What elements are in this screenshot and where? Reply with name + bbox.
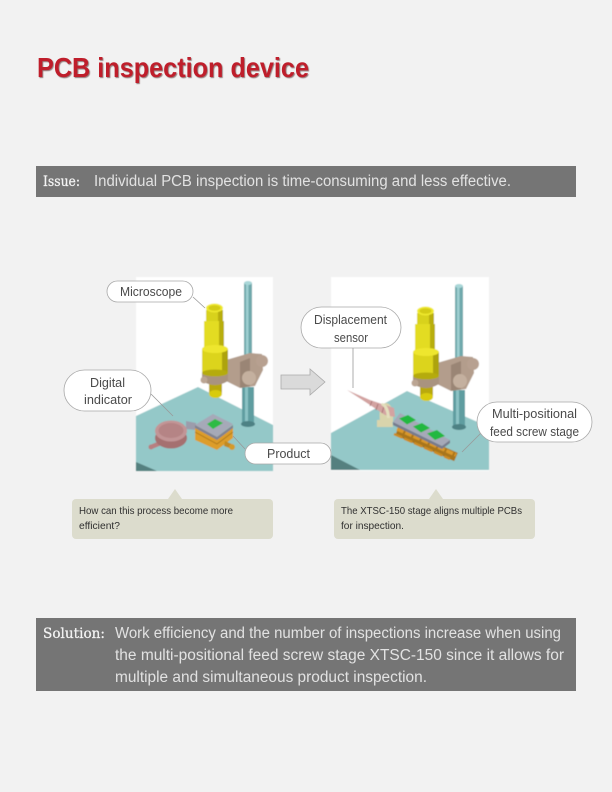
note: answer: The XTSC-150 stage aligns multiple PCBs [341,505,522,517]
displacement sensor [347,390,395,427]
callout: multi-positional feed screw stage: feed screw stage [490,425,579,439]
callout: digital indicator: Digital [90,376,125,390]
callout: microscope: Microscope [120,285,182,299]
single stage [195,414,235,450]
issue label: Issue: [43,174,80,190]
arrow: process transition [281,369,325,395]
panel: single inspection illustration [136,277,273,471]
feed screw stage [393,413,456,459]
table [331,391,489,470]
title: PCB inspection device [37,52,309,83]
solution text: the multi-positional feed screw stage XTSC-150 since it allows for [115,647,564,664]
issue text: Individual PCB inspection is time-consuming and less effective. [94,173,511,190]
callout: displacement sensor: Displacement [314,313,388,327]
note: question: efficient? [79,520,120,532]
callout: displacement sensor: sensor [334,331,368,345]
callout: digital indicator [64,370,173,416]
callout: displacement sensor [301,307,401,388]
note: answer: for inspection. [341,520,404,532]
callout: multi-positional feed screw stage: Multi-positional [492,407,577,421]
solution label: Solution: [43,626,105,642]
callout: multi-positional feed screw stage [462,402,592,452]
panel: solution banner [36,618,576,691]
solution text: multiple and simultaneous product inspection. [115,669,427,686]
microscope [412,284,479,430]
note: answer [334,489,535,539]
digital indicator [148,420,196,450]
table [136,387,273,471]
microscope [200,281,268,427]
note: question [72,489,273,539]
callout: product [233,436,331,464]
panel: issue banner [36,166,576,197]
note: question: How can this process become more [79,505,233,517]
solution text [115,625,564,686]
panel: multi-position illustration [331,277,489,471]
callout: microscope [107,281,205,308]
solution text: Work efficiency and the number of inspections increase when using [115,625,561,642]
callout: product: Product [267,447,311,461]
callout: digital indicator: indicator [84,393,132,407]
